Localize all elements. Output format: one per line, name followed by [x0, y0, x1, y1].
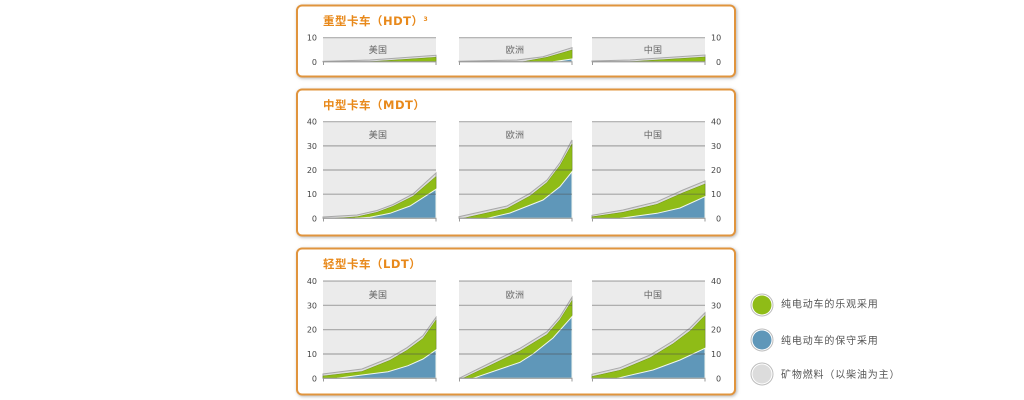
left axis labels: HDT: 10: [307, 34, 317, 42]
legend item: conservative EV adoption: [751, 329, 879, 351]
left axis labels: LDT: [307, 277, 317, 383]
left axis labels: MDT: 20: [307, 166, 317, 175]
region label: China: 中国: [644, 44, 662, 55]
chart: MDT China: [592, 122, 705, 222]
chart: MDT Europe: [459, 122, 572, 222]
right axis labels: MDT: 20: [711, 166, 721, 175]
right axis labels: LDT: 40: [711, 277, 721, 286]
left axis labels: MDT: [307, 118, 317, 223]
right axis labels: HDT: 0: [716, 58, 721, 67]
region label: Europe: 欧洲: [506, 129, 524, 140]
right axis labels: MDT: 40: [711, 118, 721, 127]
legend item: fossil fuel: [751, 363, 900, 385]
panel: light-duty trucks: [297, 248, 735, 394]
region label: Europe: 欧洲: [506, 44, 524, 55]
right axis labels: HDT: [711, 34, 721, 67]
left axis labels: LDT: 10: [307, 350, 317, 359]
panel: medium-duty trucks: [297, 90, 735, 236]
left axis labels: MDT: 30: [307, 142, 317, 151]
region label: China: 中国: [644, 289, 662, 300]
left axis labels: MDT: 40: [307, 118, 317, 127]
right axis labels: MDT: 30: [711, 142, 721, 151]
chart: LDT China: [592, 281, 705, 382]
chart: MDT USA: [323, 122, 436, 222]
legend item: fossil fuel: 矿物燃料（以柴油为主）: [781, 368, 900, 381]
region label: China: 中国: [644, 129, 662, 140]
chart: HDT Europe: [459, 38, 572, 65]
right axis labels: MDT: 0: [716, 214, 721, 223]
legend item: optimistic EV adoption: 纯电动车的乐观采用: [781, 298, 879, 310]
left axis labels: HDT: 0: [312, 58, 317, 67]
right axis labels: MDT: [711, 118, 721, 223]
legend item: conservative EV adoption: 纯电动车的保守采用: [781, 334, 879, 347]
heading: LDT: 轻型卡车（LDT）: [323, 257, 421, 271]
right axis labels: LDT: 20: [711, 326, 721, 335]
left axis labels: MDT: 0: [312, 214, 317, 223]
region label: Europe: 欧洲: [506, 289, 524, 300]
heading: HDT: 3: [424, 16, 428, 23]
region label: USA: 美国: [369, 44, 387, 55]
chart: HDT USA: [323, 38, 436, 65]
legend: [751, 294, 900, 385]
region label: USA: 美国: [369, 129, 387, 140]
chart: HDT China: [592, 38, 705, 65]
left axis labels: MDT: 10: [307, 190, 317, 199]
left axis labels: LDT: 20: [307, 326, 317, 335]
left axis labels: LDT: 40: [307, 277, 317, 286]
chart: LDT USA: [323, 281, 436, 382]
left axis labels: HDT: [307, 34, 317, 67]
chart: LDT Europe: [459, 281, 572, 382]
right axis labels: MDT: 10: [711, 190, 721, 199]
heading: HDT: 重型卡车（HDT）: [323, 14, 424, 28]
panel: heavy-duty trucks: [297, 6, 735, 76]
legend item: optimistic EV adoption: [751, 294, 879, 316]
region label: USA: 美国: [369, 289, 387, 300]
right axis labels: LDT: 10: [711, 350, 721, 359]
heading: MDT: 中型卡车（MDT）: [323, 98, 425, 112]
left axis labels: LDT: 0: [312, 374, 317, 383]
right axis labels: HDT: 10: [711, 34, 721, 42]
right axis labels: LDT: 30: [711, 301, 721, 310]
right axis labels: LDT: 0: [716, 374, 721, 383]
left axis labels: LDT: 30: [307, 301, 317, 310]
right axis labels: LDT: [711, 277, 721, 383]
